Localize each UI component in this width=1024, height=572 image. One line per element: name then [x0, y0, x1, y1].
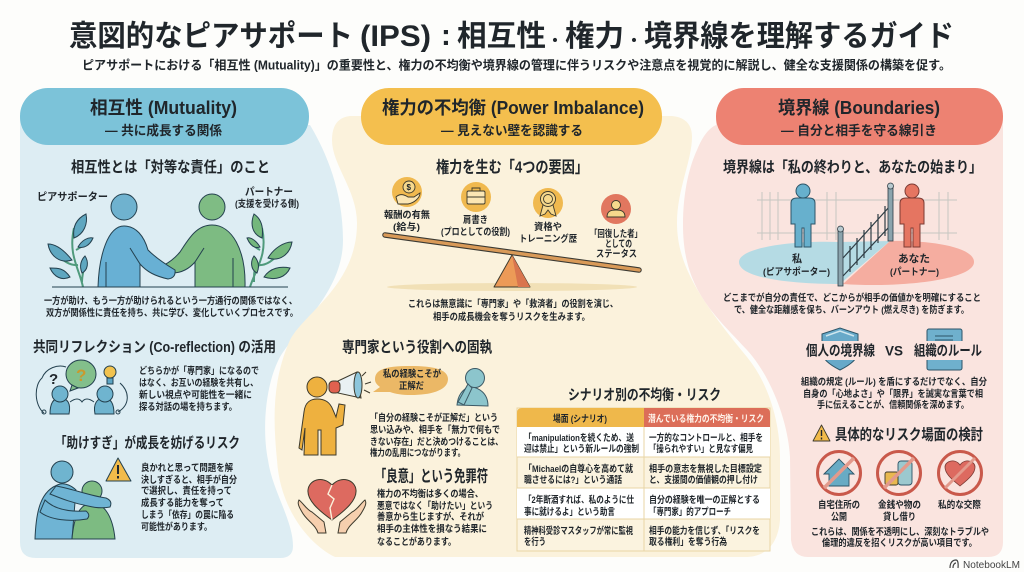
header: boundaries: — 自分と相手を守る線引き — [781, 123, 937, 138]
table row 4: を行う — [524, 536, 546, 547]
title: ・ — [626, 33, 642, 50]
icon: co-reflection dialogue: ? — [76, 366, 86, 385]
table row 4: 相手の能力を信じず、「リスクを — [649, 525, 760, 536]
text: risk note — [811, 526, 989, 549]
label: you: (パートナー) — [890, 267, 939, 278]
panel: boundaries — [683, 88, 1003, 557]
panel background: boundaries — [683, 115, 1003, 557]
badge: NotebookLM: NotebookLM — [963, 559, 1020, 571]
title — [69, 19, 954, 53]
text: over-helping description: で選択し、責任を持って — [141, 485, 232, 497]
header: power imbalance: — 見えない壁を認識する — [441, 123, 583, 138]
heading: equal responsibility: 相互性とは「対等な責任」のこと — [71, 158, 270, 176]
title: 相互性 — [457, 20, 546, 53]
text: expert role description — [370, 412, 503, 459]
icon: co-reflection dialogue: ? — [49, 371, 58, 388]
text: good intention description: 相手の主体性を損なう結果に — [377, 523, 487, 535]
label: partner: (支援を受ける側) — [235, 198, 299, 210]
text: expert role description: 権力の乱用につながります。 — [370, 447, 465, 459]
label: qualification: 資格や — [534, 221, 562, 232]
subtitle: ピアサポートにおける「相互性 (Mutuality)」の重要性と、権力の不均衡や境界線の管理に伴うリスクや注意点を視覚的に解説し、健全な支援関係の構築を促す。 — [82, 58, 951, 72]
table row 2: 職させるには?」という通話 — [524, 474, 623, 485]
speech bubble: my experience — [373, 366, 448, 395]
text: over-helping description: 決しすぎると、相手が自分 — [141, 474, 237, 486]
icon: job title briefcase — [461, 182, 491, 212]
illustration: handshake with plants — [48, 194, 292, 287]
table row 2: 「Michaelの自尊心を高めて就 — [524, 463, 634, 474]
illustration: broken heart in hands — [298, 480, 366, 533]
title: 権力 — [565, 20, 624, 53]
table row 3: 事に就けるよ」という助言 — [524, 506, 615, 517]
text: risk note: これらは、関係を不透明にし、深刻なトラブルや — [811, 526, 989, 538]
table row 1: 「manipulationを続くため、送 — [524, 432, 635, 443]
illustration: over-helping figures — [35, 461, 115, 539]
table row 2 — [524, 463, 763, 485]
text: expert role description: 「自分の経験こそが正解だ」という — [370, 412, 498, 424]
text: expert role description: 思い込みや、相手を「無力で何もで — [370, 424, 500, 436]
label: recovered status: としての — [605, 238, 632, 249]
heading: over-helping risk: 「助けすぎ」が成長を妨げるリスク — [55, 434, 240, 452]
table row 1: 迎は禁止」という新ルールの強制 — [524, 443, 639, 454]
text: mutuality description — [44, 295, 298, 319]
table header: 潜んでいる権力の不均衡・リスク — [648, 413, 764, 424]
header: power imbalance: 権力の不均衡 (Power Imbalance) — [382, 98, 644, 118]
label: home address: 自宅住所の — [818, 499, 860, 511]
header: boundaries — [716, 88, 1003, 145]
header: power imbalance — [361, 88, 662, 145]
text: over-helping description: 成長する能力を奪って — [141, 497, 224, 509]
table row 4 — [524, 525, 760, 547]
icon: compensation — [392, 177, 422, 207]
label: private relationship: 私的な交際 — [938, 499, 981, 511]
text: co-reflection description: 新しい視点や可能性を一緒に — [139, 389, 252, 401]
comparison: personal boundary vs organization rules: VS — [885, 342, 903, 358]
text: good intention description — [377, 488, 493, 548]
table row 4: 取る権利」を奪う行為 — [649, 536, 727, 547]
header: mutuality: — 共に成長する関係 — [105, 123, 222, 138]
text: comparison description — [801, 376, 987, 411]
label: money lending: 貸し借り — [883, 511, 916, 523]
text: good intention description: なることがあります。 — [377, 536, 456, 548]
header: mutuality: 相互性 (Mutuality) — [90, 98, 237, 118]
label: compensation: 報酬の有無 — [384, 209, 431, 220]
title: ・ — [547, 33, 563, 50]
illustration: fence between two people — [739, 183, 974, 286]
label: money lending: 金銭や物の — [878, 499, 921, 511]
label: job title — [441, 214, 510, 237]
text: factors note: 相手の成長機会を奪うリスクを生みます。 — [433, 311, 590, 323]
table row 1: 一方的なコントロールと、相手を — [649, 432, 763, 443]
icon: warning triangle — [813, 425, 830, 441]
heading: risk scenarios: 具体的なリスク場面の検討 — [835, 426, 983, 444]
panel background: mutuality — [20, 115, 343, 558]
text: over-helping description: 良かれと思って問題を解 — [141, 462, 233, 474]
text: co-reflection description: どちらかが「専門家」になるので — [139, 365, 259, 377]
text: risk note: 倫理的違反を招くリスクが高い項目です。 — [822, 537, 977, 549]
label: you — [890, 253, 939, 278]
icon: shield — [822, 328, 858, 370]
heading: co-reflection: 共同リフレクション (Co-reflection) の活用 — [33, 339, 276, 356]
panel: mutuality — [20, 88, 343, 558]
text: boundary description: で、健全な距離感を保ち、バーンアウト (燃え尽き) を防ぎます。 — [734, 304, 969, 316]
label: partner: パートナー — [245, 186, 293, 198]
table row 1: 「操られやすい」と見なす偏見 — [649, 443, 753, 454]
table row 3: 自分の経験を唯一の正解とする — [649, 494, 760, 505]
table row 4: 精神科受診マスタッフが常に監視 — [524, 525, 633, 536]
label: home address — [818, 499, 860, 523]
table row 2: 相手の意志を無視した目標設定 — [649, 463, 763, 474]
icon: no private relationship — [938, 452, 982, 494]
heading: expert role: 専門家という役割への固執 — [342, 338, 492, 356]
text: over-helping description: しまう「依存」の罠に陥る — [141, 509, 234, 521]
label: qualification — [519, 221, 578, 244]
speech bubble: my experience: 私の経験こそが — [383, 368, 442, 379]
band behind comparison label — [800, 341, 988, 360]
label: recovered status: 「回復した者」 — [590, 228, 642, 239]
label: recovered status — [590, 228, 642, 259]
illustration: silenced person — [457, 368, 488, 406]
illustration: seesaw — [385, 235, 639, 291]
text: mutuality description: 一方が助け、もう一方が助けられるという一方通行の関係ではなく、 — [44, 295, 297, 307]
text: good intention description: 善意から生じますが、それが — [377, 511, 484, 523]
label: job title: (プロとしての役割) — [441, 226, 510, 237]
text: co-reflection description — [139, 365, 259, 413]
illustration: person with megaphone — [299, 372, 371, 455]
icon: co-reflection dialogue — [36, 360, 127, 414]
table row 1 — [524, 432, 763, 454]
label: job title: 肩書き — [463, 214, 488, 225]
text: mutuality description: 双方が関係性に責任を持ち、共に学び、変化していくプロセスです。 — [46, 307, 298, 319]
speech bubble: my experience: 正解だ — [399, 380, 425, 391]
label: home address: 公開 — [831, 512, 847, 523]
label: you: あなた — [898, 253, 930, 265]
heading: good intention: 「良意」という免罪符 — [375, 466, 488, 486]
text: good intention description: 権力の不均衡は多くの場合、 — [377, 488, 483, 500]
label: qualification: トレーニング歴 — [519, 233, 578, 244]
panel: power imbalance — [275, 88, 780, 557]
text: factors note: これらは無意識に「専門家」や「救済者」の役割を演じ、 — [408, 298, 618, 310]
comparison: personal boundary vs organization rules: 組織のルール — [914, 342, 982, 358]
header: boundaries: 境界線 (Boundaries) — [778, 98, 940, 118]
text: boundary description — [723, 292, 981, 316]
text: co-reflection description: はなく、お互いの経験を共有し、 — [139, 377, 258, 389]
text: factors note — [408, 298, 618, 323]
text: comparison description: 組織の規定 (ルール) を盾にするだけでなく、自分 — [801, 376, 987, 388]
text: over-helping description: 可能性があります。 — [141, 521, 212, 533]
icon: rule book — [927, 329, 962, 370]
heading: where I end: 境界線は「私の終わりと、あなたの始まり」 — [723, 158, 982, 176]
icon: no money lending — [878, 452, 920, 494]
icon: warning triangle — [106, 458, 131, 481]
title: 意図的なピアサポート — [69, 20, 353, 53]
title: 境界線を理解するガイド — [644, 20, 954, 53]
label: me: 私 — [792, 252, 802, 265]
label: partner — [235, 186, 299, 210]
comparison: personal boundary vs organization rules: 個人の境界線 — [806, 342, 875, 358]
label: money lending — [878, 499, 921, 523]
icon: recovered person — [601, 194, 631, 224]
table row 2: と、支援間の価値観の押し付け — [649, 474, 758, 485]
icon: compensation: $ — [406, 183, 412, 192]
header: mutuality — [20, 88, 309, 145]
table: scenarios and risks — [517, 408, 770, 551]
icon: qualification badge — [533, 188, 563, 218]
table row 3 — [524, 494, 760, 517]
comparison: personal boundary vs organization rules — [806, 342, 982, 358]
text: comparison description: 自身の「心地よさ」や「限界」を誠実な言葉で相 — [803, 388, 983, 400]
text: good intention description: 悪意ではなく「助けたい」という — [377, 500, 493, 512]
text: over-helping description — [141, 462, 237, 533]
table header — [553, 413, 764, 424]
label: peer supporter: ピアサポーター — [37, 191, 108, 203]
icon: no home address — [818, 452, 860, 494]
text: comparison description: 手に伝えることが、信頼関係を深めます。 — [817, 399, 969, 411]
label: me: (ピアサポーター) — [763, 266, 830, 278]
label: me — [763, 252, 830, 278]
label: recovered status: ステータス — [596, 248, 637, 259]
text: expert role description: きない存在」だと決めつけることは、 — [370, 436, 503, 448]
table row 3: 「2年断酒すれば、私のように仕 — [524, 494, 635, 505]
title: (IPS) — [360, 20, 431, 53]
heading: four factors: 権力を生む「4つの要因」 — [436, 158, 588, 176]
table header: 場面 (シナリオ) — [553, 413, 607, 424]
label: compensation — [384, 209, 431, 232]
text: co-reflection description: 探る対話の場を持ちます。 — [139, 401, 237, 413]
title: : — [441, 19, 451, 52]
text: boundary description: どこまでが自分の責任で、どこからが相手の価値かを明確にすること — [723, 292, 981, 304]
panel background: power imbalance — [275, 116, 780, 557]
label: compensation: (給与) — [393, 221, 420, 232]
heading: scenario table: シナリオ別の不均衡・リスク — [568, 386, 721, 404]
table row 3: 「専門家」的アプローチ — [649, 506, 731, 517]
